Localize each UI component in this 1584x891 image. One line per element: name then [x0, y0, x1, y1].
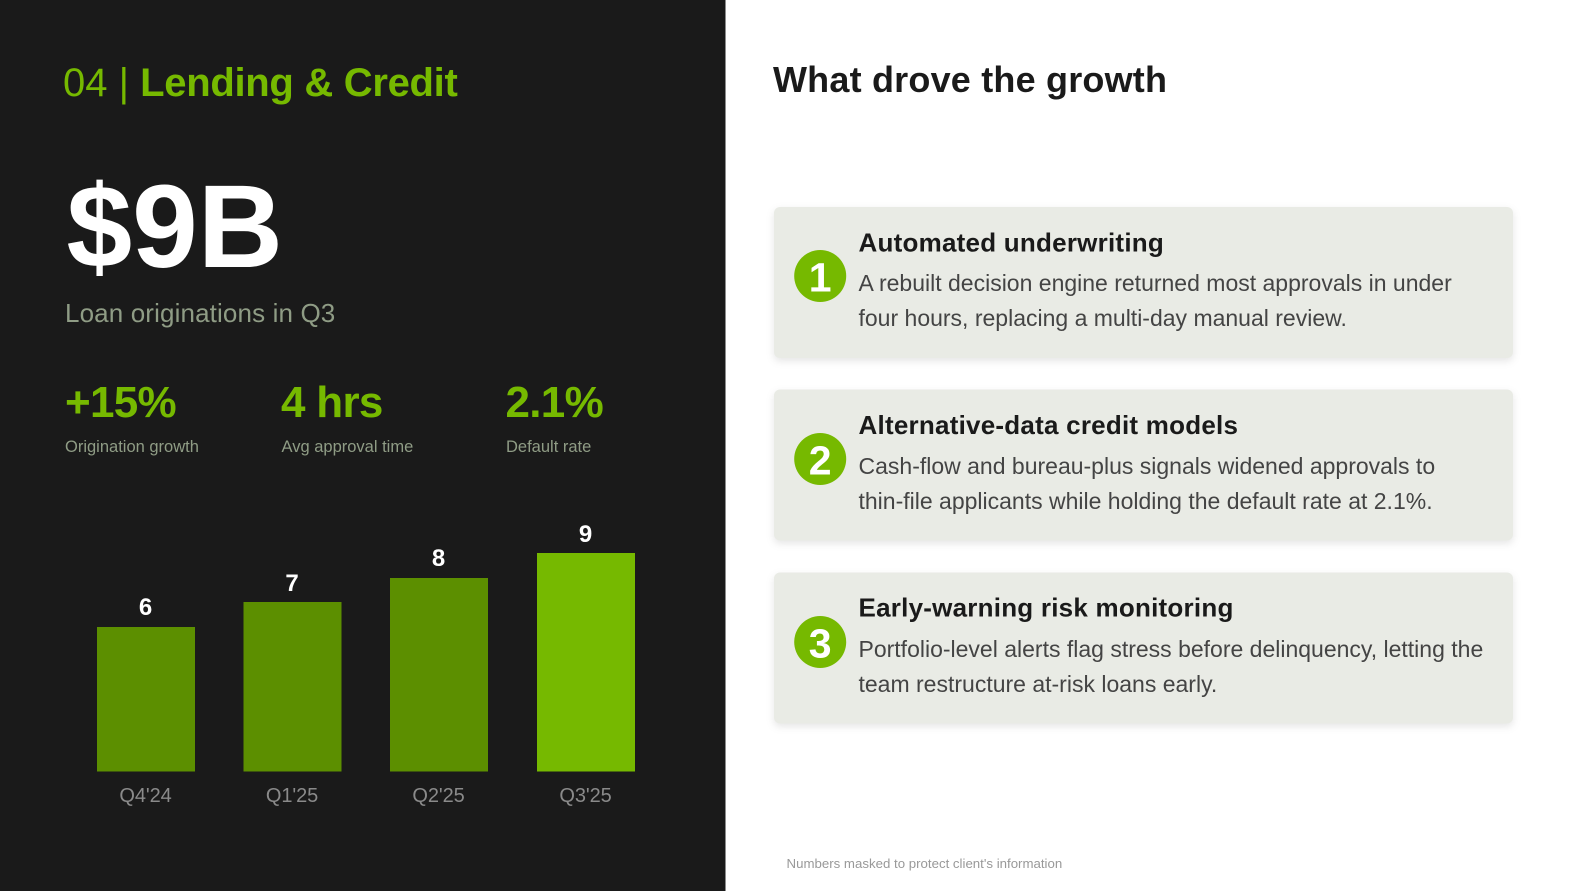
kpi row: [65, 378, 603, 456]
kpi: origination growth: Origination growth: [65, 438, 199, 456]
panel: card 3: [774, 572, 1513, 724]
kpi: default rate: 2.1%: [506, 378, 603, 427]
bar: Q1'25: [244, 570, 342, 807]
bar: Q3'25: [537, 521, 635, 807]
panel: card 2: [774, 390, 1513, 540]
kpi: approval time: 4 hrs: [281, 378, 383, 427]
bar: Q1'25: Q1'25: [266, 785, 318, 807]
bar: Q4'24: Q4'24: [119, 785, 172, 807]
bar: Q2'25: [390, 545, 488, 807]
kpi: default rate: Default rate: [506, 438, 591, 456]
bar: Q2'25: 8: [432, 545, 445, 572]
hero number: $9B: [66, 161, 283, 293]
card 3 body: Portfolio-level alerts flag stress before delinquency, letting the: [858, 636, 1483, 662]
card 2 body: thin-file applicants while holding the default rate at 2.1%.: [858, 488, 1433, 514]
section title: 04 | Lending & Credit: [63, 61, 458, 105]
bar: Q3'25: 9: [579, 521, 592, 548]
bar: Q4'24: [97, 594, 195, 807]
kpi: default rate: [506, 378, 603, 456]
card 1 heading: Automated underwriting: [858, 228, 1164, 258]
bar: Q3'25: Q3'25: [559, 785, 612, 807]
bar chart: [97, 521, 635, 807]
card 3 heading: Early-warning risk monitoring: [858, 592, 1234, 622]
kpi: approval time: [281, 378, 413, 456]
icon: number 2: 2: [809, 438, 832, 484]
icon: number 1: 1: [809, 254, 832, 300]
icon: number 1: [794, 250, 846, 302]
card 1 body: four hours, replacing a multi-day manual review.: [858, 305, 1347, 331]
icon: number 3: [794, 616, 846, 668]
kpi: origination growth: +15%: [65, 378, 176, 427]
card 2 body: Cash-flow and bureau-plus signals widened approvals to: [858, 453, 1435, 479]
footnote: Numbers masked to protect client's information: [786, 856, 1062, 871]
card 1 body: A rebuilt decision engine returned most approvals in under: [858, 270, 1452, 296]
bar: Q4'24: 6: [139, 594, 152, 621]
kpi: approval time: Avg approval time: [282, 438, 413, 456]
icon: number 2: [794, 433, 846, 485]
hero caption: Loan originations in Q3: [65, 298, 335, 328]
kpi: origination growth: [65, 378, 199, 456]
bar: Q1'25: 7: [285, 570, 299, 597]
bar: Q2'25: Q2'25: [412, 785, 465, 807]
panel: left dark background: [0, 0, 726, 891]
icon: number 3: 3: [809, 620, 832, 666]
card 2 heading: Alternative-data credit models: [858, 410, 1238, 440]
right heading: What drove the growth: [773, 59, 1167, 100]
panel: card 1: [774, 207, 1513, 358]
card 3 body: team restructure at-risk loans early.: [858, 671, 1217, 697]
